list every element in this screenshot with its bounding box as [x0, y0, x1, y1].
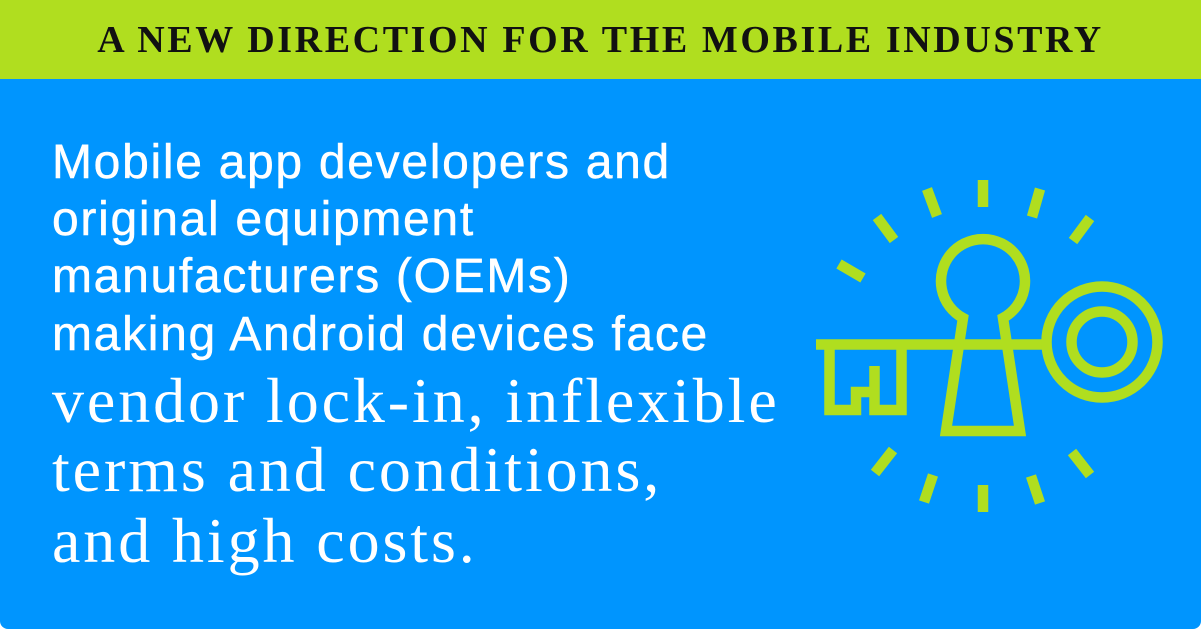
body text: Mobile app developers and [52, 136, 671, 189]
body text [52, 136, 780, 576]
keyhole [941, 239, 1025, 431]
body text: original equipment [52, 193, 475, 246]
body text: vendor lock-in, inflexible [52, 365, 780, 436]
body text: manufacturers (OEMs) [52, 250, 571, 303]
body text: making Android devices face [52, 308, 709, 361]
header banner [0, 0, 1201, 79]
body text: and high costs. [52, 505, 478, 576]
rays [839, 180, 1090, 512]
header banner: A NEW DIRECTION FOR THE MOBILE INDUSTRY [97, 19, 1104, 61]
key shaft and teeth [816, 344, 1047, 410]
key ring [1046, 286, 1158, 398]
body text: terms and conditions, [52, 434, 662, 505]
